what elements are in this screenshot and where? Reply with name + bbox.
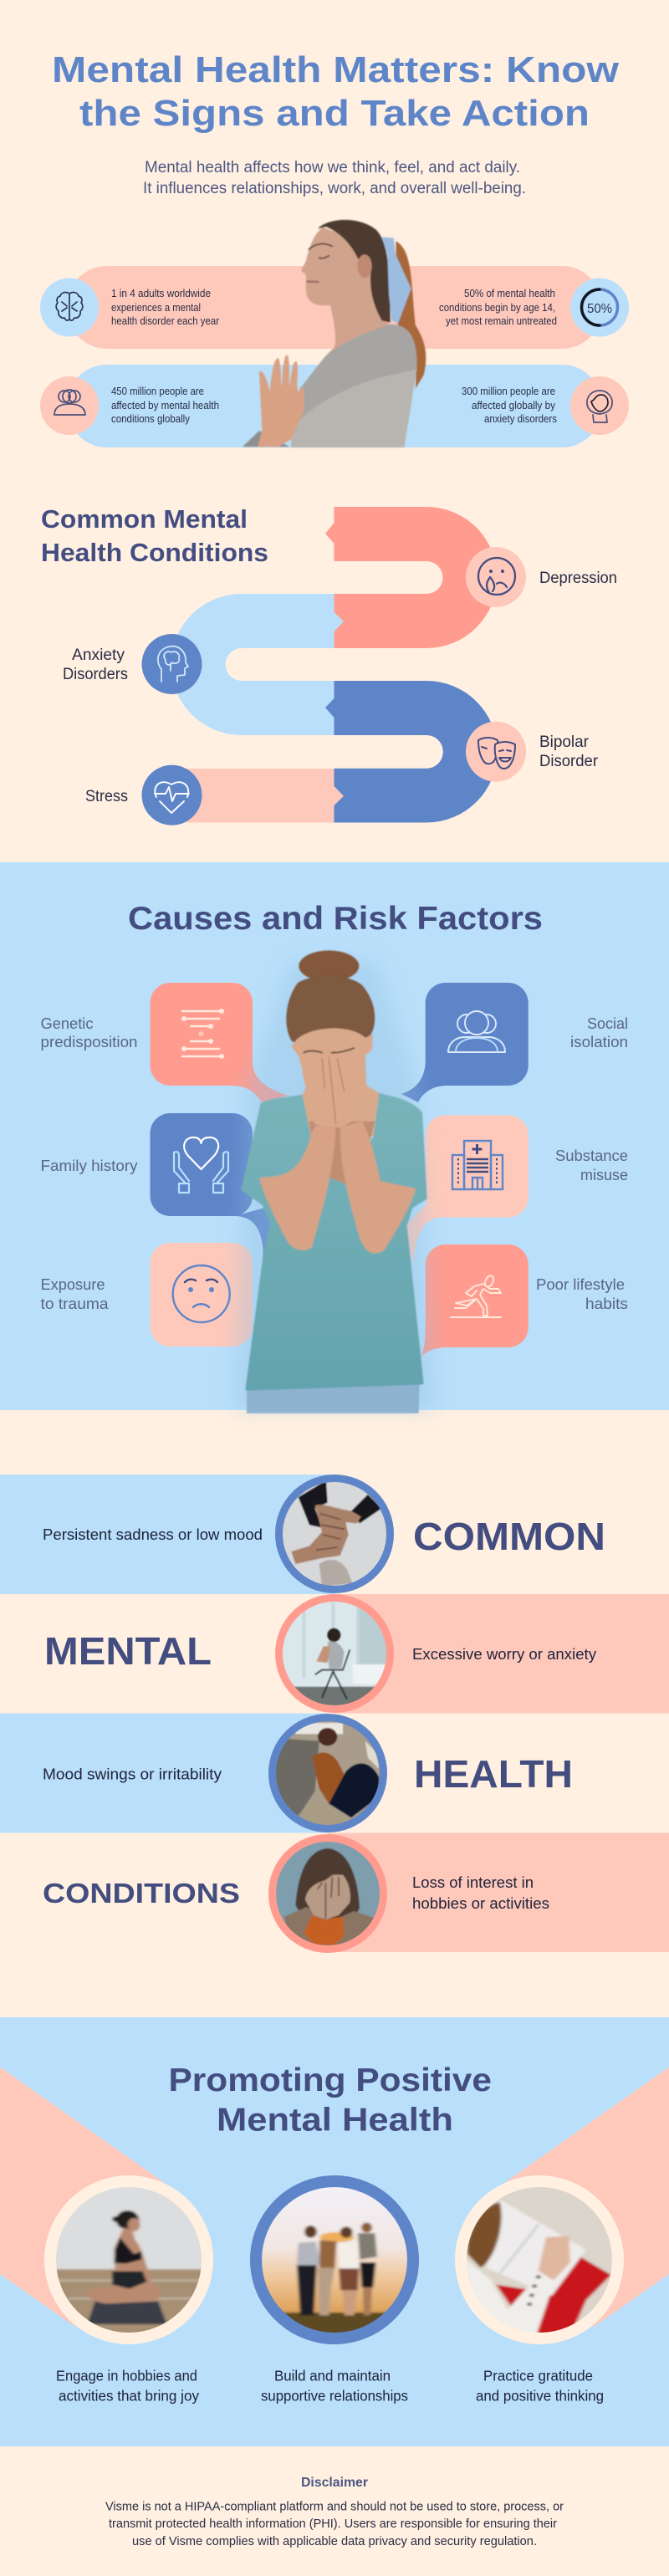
photo: woman covering her face with hands [268, 1834, 387, 1953]
icon: crying face [466, 547, 526, 607]
photo: friends at sunset [250, 2175, 419, 2344]
heading: promoting [169, 2062, 492, 2138]
band: loss of interest [328, 1833, 669, 1952]
caption: relationships: Build and maintain [274, 2367, 391, 2384]
label: poor lifestyle habits [536, 1275, 628, 1312]
panel: promoting positive mental health [0, 2017, 669, 2446]
blue stat pill [67, 365, 602, 447]
disclaimer [105, 2476, 564, 2548]
heading: common conditions [41, 504, 268, 567]
caption: gratitude: and positive thinking [476, 2387, 604, 2404]
icon: head with brain [142, 634, 202, 694]
disclaimer body [105, 2501, 564, 2548]
text: excessive worry: Excessive worry or anxiety [412, 1646, 596, 1663]
caption: relationships [261, 2367, 408, 2404]
label: anxiety disorders: Anxiety [72, 647, 125, 664]
label: substance misuse: Substance [555, 1147, 628, 1164]
pink band [171, 769, 344, 823]
heading: promoting: Promoting Positive [169, 2062, 492, 2098]
left pink wedge [0, 2067, 162, 2327]
coral band [325, 507, 497, 648]
tile: family history [151, 1113, 278, 1259]
label: exposure to trauma [40, 1275, 109, 1312]
text: persistent sadness: Persistent sadness or low mood [43, 1526, 263, 1543]
label: family history: Family history [40, 1157, 138, 1174]
caption: relationships: supportive relationships [261, 2387, 408, 2404]
text: loss of interest: hobbies or activities [412, 1895, 549, 1912]
stat text: 1 in 4 adults: 1 in 4 adults worldwide [111, 288, 211, 299]
stat text: 1 in 4 adults [111, 288, 219, 327]
panel: statistics [40, 220, 629, 447]
caption: hobbies: Engage in hobbies and [56, 2367, 197, 2384]
heading: common conditions: Health Conditions [41, 538, 268, 567]
stat text: 450 million: conditions globally [111, 413, 191, 425]
stat text: 1 in 4 adults: experiences a mental [111, 302, 201, 314]
tile: substance misuse [405, 1115, 529, 1265]
icon: brain [40, 278, 99, 336]
icon: theatre masks [466, 722, 526, 782]
heading word: common: COMMON [413, 1515, 605, 1558]
disclaimer body: Visme is not a HIPAA-compliant platform and should not be used to store, process, or [105, 2501, 564, 2514]
label: substance misuse: misuse [580, 1166, 628, 1183]
stat text: 300 million: anxiety disorders [484, 413, 557, 425]
text: loss of interest [412, 1874, 549, 1912]
title: the Signs and Take Action [79, 93, 590, 134]
band: mood swings [0, 1713, 328, 1833]
photo: woman sitting against sofa [268, 1714, 387, 1832]
chart: conditions serpentine path [63, 507, 617, 825]
tile: poor lifestyle [421, 1245, 529, 1357]
stat text: 50 percent: 50% of mental health [464, 288, 555, 299]
heading word: health: HEALTH [414, 1752, 573, 1796]
icon: anxious head [570, 376, 629, 435]
label: anxiety disorders: Disorders [63, 666, 128, 683]
right pink wedge [507, 2067, 669, 2327]
panel: common mental health conditions bands [0, 1475, 669, 1953]
tile: genetic [151, 983, 289, 1102]
disclaimer body: use of Visme complies with applicable data privacy and security regulation. [132, 2535, 537, 2548]
stat text: 300 million [462, 386, 557, 425]
label: exposure to trauma: to trauma [40, 1295, 109, 1312]
label: anxiety disorders [63, 647, 128, 683]
label: bipolar disorder [539, 733, 599, 770]
label: genetic predisposition: Genetic [40, 1015, 94, 1032]
text: mood swings: Mood swings or irritability [43, 1766, 222, 1783]
label: stress: Stress [85, 788, 128, 805]
intro text: Mental health affects how we think, feel, and act daily. [145, 159, 520, 176]
intro text: It influences relationships, work, and overall well-being. [143, 180, 526, 197]
stat text: 450 million: affected by mental health [111, 400, 219, 411]
blue band [325, 681, 498, 823]
label: social isolation: Social [587, 1015, 628, 1032]
label: substance misuse [555, 1147, 628, 1183]
section background [0, 862, 669, 1410]
icon: people [40, 376, 99, 435]
section background [0, 2017, 669, 2446]
photo: woman covering her face [234, 950, 435, 1413]
stat text: 50 percent [439, 288, 557, 327]
heading word: conditions: CONDITIONS [43, 1878, 240, 1909]
photo: woman on chair by the window [275, 1594, 394, 1713]
label: bipolar disorder: Bipolar [539, 733, 590, 751]
label: social isolation [570, 1015, 628, 1050]
heading: promoting: Mental Health [217, 2103, 453, 2138]
label: depression: Depression [539, 570, 617, 587]
heading word: mental: MENTAL [44, 1629, 212, 1673]
caption: gratitude: Practice gratitude [483, 2367, 593, 2384]
photo: writing in a journal [455, 2175, 624, 2344]
stat text: 1 in 4 adults: health disorder each year [111, 315, 219, 327]
band: sadness [0, 1475, 334, 1594]
light blue band [171, 594, 344, 735]
label: genetic predisposition [40, 1015, 137, 1050]
title [52, 49, 620, 134]
icon: 50 percent ring: 50% [587, 302, 612, 316]
icon: 50 percent ring [570, 278, 629, 336]
caption: gratitude [476, 2367, 604, 2404]
title: Mental Health Matters: Know [52, 49, 620, 90]
stat text: 450 million [111, 386, 219, 425]
panel: causes and risk factors [0, 862, 669, 1413]
label: exposure to trauma: Exposure [40, 1275, 105, 1293]
stat text: 50 percent: conditions begin by age 14, [439, 302, 555, 314]
label: poor lifestyle habits: Poor lifestyle [536, 1275, 625, 1293]
stat text: 50 percent: yet most remain untreated [446, 315, 557, 327]
heading: causes: Causes and Risk Factors [128, 901, 543, 937]
label: genetic predisposition: predisposition [40, 1033, 137, 1050]
disclaimer heading: Disclaimer [301, 2476, 368, 2490]
photo: woman meditating [243, 220, 426, 447]
tile: social isolation [401, 983, 529, 1102]
photo: joined hands [275, 1475, 394, 1593]
caption: hobbies [56, 2367, 199, 2404]
stat text: 450 million: 450 million people are [111, 386, 204, 397]
intro text [143, 159, 526, 197]
pink stat pill [67, 266, 602, 349]
disclaimer body: transmit protected health information (PHI). Users are responsible for ensuring their [109, 2517, 557, 2531]
label: social isolation: isolation [570, 1033, 628, 1050]
band: worry [334, 1594, 669, 1713]
text: loss of interest: Loss of interest in [412, 1874, 534, 1891]
tile: exposure to trauma [151, 1243, 253, 1347]
stat text: 300 million: affected globally by [472, 400, 556, 411]
heading: common conditions: Common Mental [41, 504, 248, 534]
label: bipolar disorder: Disorder [539, 753, 599, 770]
stat text: 300 million: 300 million people are [462, 386, 555, 397]
photo: yoga pose [44, 2175, 213, 2344]
label: poor lifestyle habits: habits [585, 1295, 628, 1312]
icon: heartbeat [142, 765, 202, 825]
caption: hobbies: activities that bring joy [59, 2387, 199, 2404]
